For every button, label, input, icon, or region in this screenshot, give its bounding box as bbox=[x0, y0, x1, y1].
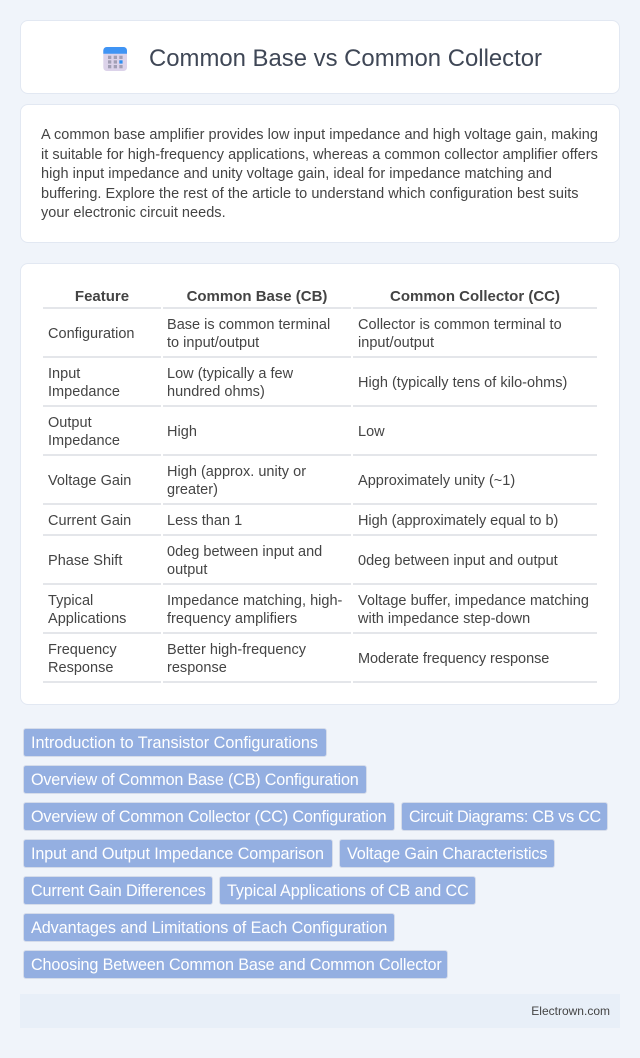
comparison table panel: Low bbox=[358, 424, 385, 440]
row: typical applications: Typical bbox=[48, 593, 93, 609]
table header: common base: Common Base (CB) bbox=[187, 288, 327, 305]
tag: Current Gain Differences bbox=[31, 882, 206, 900]
comparison table panel: High (typically tens of kilo-ohms) bbox=[358, 375, 567, 391]
table header: common collector: Common Collector (CC) bbox=[390, 288, 560, 305]
tag: Typical Applications of CB and CC bbox=[227, 882, 469, 900]
comparison table panel: response bbox=[167, 660, 227, 676]
tag: Voltage Gain Characteristics bbox=[347, 845, 547, 863]
tag bbox=[401, 802, 608, 831]
tag bbox=[339, 839, 555, 868]
tag: Advantages and Limitations of Each Configuration bbox=[31, 919, 387, 937]
comparison table panel bbox=[20, 263, 620, 705]
comparison table panel: with impedance step-down bbox=[358, 611, 530, 627]
source credit: Electrown.com bbox=[531, 1004, 610, 1018]
comparison table panel: Better high-frequency bbox=[167, 642, 306, 658]
row: frequency response: Frequency bbox=[48, 642, 117, 658]
tag bbox=[23, 876, 213, 905]
comparison table panel: High bbox=[167, 424, 197, 440]
comparison table panel: Moderate frequency response bbox=[358, 651, 549, 667]
tag bbox=[219, 876, 476, 905]
comparison table panel: Less than 1 bbox=[167, 513, 242, 529]
tag: Circuit Diagrams: CB vs CC bbox=[409, 808, 601, 826]
tag: Choosing Between Common Base and Common Collector bbox=[31, 956, 442, 974]
title: Common Base vs Common Collector bbox=[149, 45, 542, 72]
tag: Input and Output Impedance Comparison bbox=[31, 845, 324, 863]
tag bbox=[23, 913, 395, 942]
row: output impedance: Impedance bbox=[48, 433, 120, 449]
comparison table panel: Low (typically a few bbox=[167, 366, 293, 382]
row: current gain: Current Gain bbox=[48, 513, 131, 529]
row: input impedance: Impedance bbox=[48, 384, 120, 400]
comparison table panel: Impedance matching, high- bbox=[167, 593, 342, 609]
row: frequency response: Response bbox=[48, 660, 113, 676]
intro paragraph: high input impedance and unity voltage gain, ideal for impedance matching and bbox=[41, 166, 552, 182]
intro paragraph: your electronic circuit needs. bbox=[41, 205, 226, 221]
comparison table panel: frequency amplifiers bbox=[167, 611, 297, 627]
tag: Introduction to Transistor Configurations bbox=[31, 734, 318, 752]
tag: Overview of Common Base (CB) Configuration bbox=[31, 771, 359, 789]
intro paragraph: A common base amplifier provides low input impedance and high voltage gain, making bbox=[41, 127, 598, 143]
row: output impedance: Output bbox=[48, 415, 92, 431]
comparison table panel: hundred ohms) bbox=[167, 384, 265, 400]
row: typical applications bbox=[48, 593, 126, 627]
footer bar bbox=[20, 994, 620, 1028]
comparison table panel: Voltage buffer, impedance matching bbox=[358, 593, 589, 609]
comparison table panel: High (approximately equal to b) bbox=[358, 513, 558, 529]
row: phase shift: Phase Shift bbox=[48, 553, 122, 569]
tag bbox=[23, 839, 333, 868]
tag bbox=[23, 950, 448, 979]
comparison table panel: 0deg between input and bbox=[167, 544, 322, 560]
row: voltage gain: Voltage Gain bbox=[48, 473, 131, 489]
tag bbox=[23, 802, 395, 831]
intro paragraph: buffering. Explore the rest of the article to understand which configuration best suits bbox=[41, 186, 579, 202]
row: input impedance: Input bbox=[48, 366, 80, 382]
row: frequency response bbox=[48, 642, 117, 676]
topic tags bbox=[23, 728, 608, 979]
comparison table panel: to input/output bbox=[167, 335, 259, 351]
tag: Overview of Common Collector (CC) Configuration bbox=[31, 808, 386, 826]
comparison table panel: 0deg between input and output bbox=[358, 553, 558, 569]
intro text panel bbox=[20, 104, 620, 243]
intro paragraph: it suitable for high-frequency applications, whereas a common collector amplifier offers bbox=[41, 147, 598, 163]
comparison table panel: input/output bbox=[358, 335, 434, 351]
row: output impedance bbox=[48, 415, 120, 449]
tag bbox=[23, 765, 367, 794]
comparison table panel: Collector is common terminal to bbox=[358, 317, 562, 333]
comparison table panel: output bbox=[167, 562, 207, 578]
icon: calendar bbox=[103, 47, 127, 71]
table header: feature: Feature bbox=[75, 288, 129, 305]
row: input impedance bbox=[48, 366, 120, 400]
row: configuration: Configuration bbox=[48, 326, 135, 342]
row: typical applications: Applications bbox=[48, 611, 126, 627]
comparison table panel: Base is common terminal bbox=[167, 317, 330, 333]
comparison table panel: Approximately unity (~1) bbox=[358, 473, 515, 489]
tag bbox=[23, 728, 327, 757]
intro paragraph bbox=[41, 127, 598, 221]
header card bbox=[20, 20, 620, 94]
comparison table panel: greater) bbox=[167, 482, 218, 498]
comparison table panel: High (approx. unity or bbox=[167, 464, 306, 480]
